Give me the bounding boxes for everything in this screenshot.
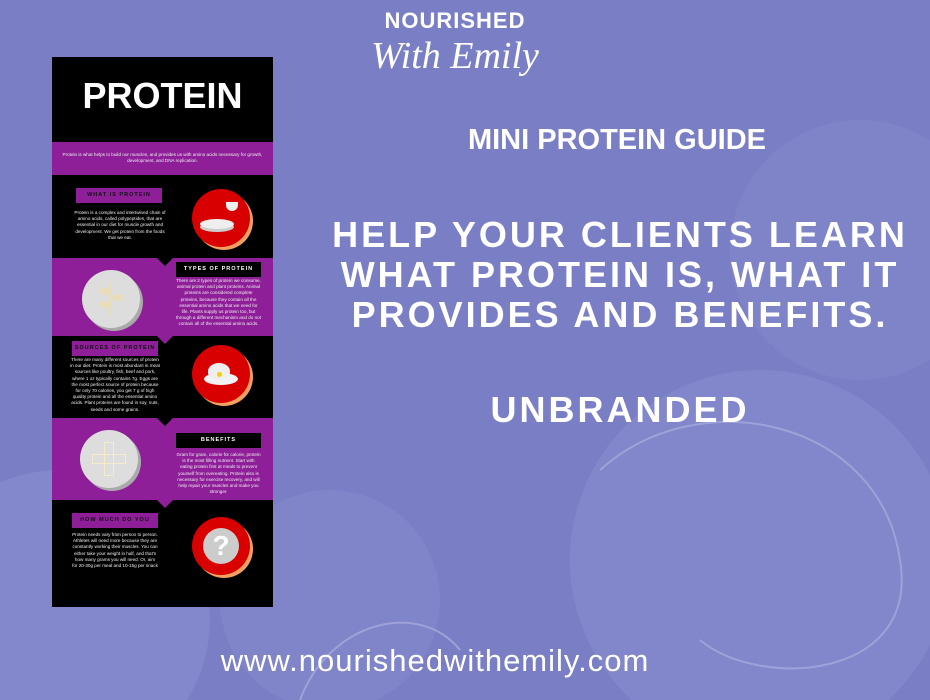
section: benefits xyxy=(80,430,261,494)
section: sources xyxy=(70,341,253,412)
section: types: TYPES OF PROTEIN xyxy=(184,266,253,272)
unbranded label: UNBRANDED xyxy=(490,389,750,430)
section: what is protein: WHAT IS PROTEIN xyxy=(87,192,151,198)
icon: egg xyxy=(192,345,250,403)
infographic xyxy=(52,57,273,607)
icon: question xyxy=(192,517,250,575)
section: sources: There are many different sources of protein in our diet. Protein is most abundant in meat sources like poultry, fish, beef and pork, where 1 oz typically contains 7g. Eggs are the most perfect source of protein because for only 70 calories, you get 7 g of high quality protein and all the essential amino acids. Plant proteins are found in soy, nuts, seeds and some grains. xyxy=(70,357,160,412)
section: sources: SOURCES OF PROTEIN xyxy=(75,345,155,351)
section: how much: HOW MUCH DO YOU NEED xyxy=(80,517,150,538)
section: how much xyxy=(72,513,253,578)
brand logo: With Emily xyxy=(371,35,539,77)
brand logo: NOURISHED xyxy=(384,8,526,33)
icon: plates xyxy=(192,189,250,247)
section: how much: Protein needs vary from person to person. Athletes will need more because they are constantly working their muscles. You can either take your weight in half, and that's how many grams you will need. Or, aim for 20-30g per meal and 10-15g per snack xyxy=(72,532,158,568)
section: what is protein: Protein is a complex and intertwined chain of amino acids, called polypeptides, that are essential in our diet for muscle growth and development. We get protein from the foods that we eat. xyxy=(74,210,166,240)
brand logo xyxy=(371,8,539,77)
intro band xyxy=(52,142,273,175)
headline: HELP YOUR CLIENTS LEARN xyxy=(332,214,908,255)
subtitle: MINI PROTEIN GUIDE xyxy=(468,124,766,156)
intro band: Protein is what helps to build our muscles, and provides us with amino acids necessary for growth, development, and DNA replication. xyxy=(63,152,262,163)
website url: www.nourishedwithemily.com xyxy=(221,643,649,678)
section: what is protein xyxy=(74,188,253,250)
title: PROTEIN xyxy=(82,75,242,116)
headline: WHAT PROTEIN IS, WHAT IT xyxy=(341,254,899,295)
section: types xyxy=(82,262,261,331)
headline: PROVIDES AND BENEFITS. xyxy=(352,294,888,335)
section: benefits: BENEFITS xyxy=(201,437,236,443)
icon: plant xyxy=(82,270,140,328)
icon: question: ? xyxy=(212,530,230,561)
icon: plus xyxy=(80,430,138,488)
section: types: There are 2 types of protein we consume, animal protein and plant proteins. Animal proteins are considered complete proteins, because they contain all the essential amino acids that we need for life. Plants supply us protein too, but through a different mechanism and do not contain all of the essential amino acids. xyxy=(176,278,261,326)
section: benefits: Gram for gram, calorie for calorie, protein is the most filling nutrient. Start with eating protein first at meals to prevent yourself from overeating. Protein also is necessary for exercise recovery, and will help repair your muscles and make you stronger. xyxy=(176,452,260,494)
headline xyxy=(332,214,908,335)
